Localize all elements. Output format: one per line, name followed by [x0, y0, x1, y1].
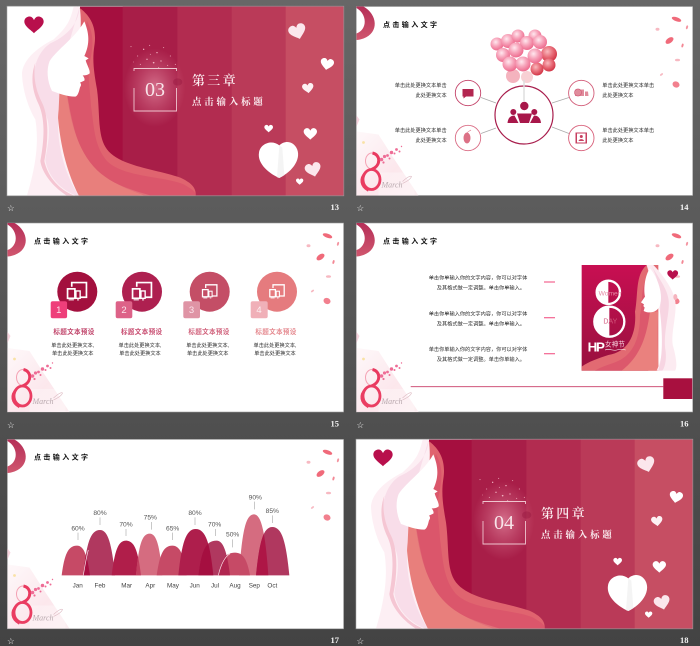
text block 2: 及其格式做一定调整。单击你单输入。 — [437, 320, 525, 328]
icon: chat bubble — [455, 80, 481, 106]
text block: upper right: 此处更换文本 — [602, 91, 633, 99]
text block: upper right — [602, 81, 654, 99]
month labels: Jan — [73, 582, 83, 589]
header: 点击输入文字 — [34, 452, 90, 462]
decorations: crescent, petals and number eight — [356, 223, 688, 412]
text block 2 — [429, 310, 528, 328]
item 4 — [251, 272, 297, 357]
text block: lower right: 此处更换文本 — [602, 136, 633, 144]
slide 16: text list with picture card — [356, 223, 693, 412]
month labels: May — [167, 582, 180, 589]
illustration: woman with flowing hair, stripes and hearts — [356, 440, 692, 628]
footer star 16: ☆ — [356, 421, 364, 431]
value labels — [71, 494, 279, 539]
chapter number: 04 — [494, 512, 514, 534]
header: 点击输入文字 — [383, 236, 439, 246]
month labels: Jun — [190, 582, 200, 589]
item 4: 标题文本预设 — [255, 327, 297, 336]
month labels: Mar — [121, 582, 132, 589]
chapter heading: 第三章 — [192, 73, 238, 88]
chapter number bracket — [134, 68, 176, 111]
slide 15: four numbered items — [7, 223, 344, 412]
item 2: 单击此处更换文本 — [119, 349, 161, 357]
value labels: 50% — [226, 532, 239, 539]
item 4: 单击此处更换文本, — [254, 341, 296, 349]
value labels: 70% — [119, 522, 133, 529]
logo: HP goddess festival — [588, 340, 626, 355]
page number 18: 18 — [680, 635, 688, 645]
decorations: crescent, petals and number eight — [8, 223, 339, 412]
text block 1: 单击你单输入你的文字内容，你可以对字体 — [429, 274, 528, 282]
month labels: Jul — [211, 582, 219, 589]
page number 17: 17 — [330, 635, 340, 645]
number eight with labels: DAY — [603, 318, 618, 325]
dash markers — [544, 282, 555, 354]
slide 17: mountain chart by month — [7, 439, 344, 629]
page number 13: 13 — [330, 202, 339, 212]
value labels: 75% — [144, 515, 157, 522]
item 2: 2 — [121, 305, 127, 316]
text block: lower left: 单击此处更换文本单击 — [395, 126, 447, 134]
text block: lower left: 此处更换文本 — [416, 136, 447, 144]
item 2: 单击此处更换文本, — [119, 341, 161, 349]
page number 15: 15 — [330, 418, 339, 428]
illustration: woman with flowing hair, stripes and hearts — [7, 7, 343, 195]
item 1 — [51, 272, 97, 357]
text block 3: 及其格式做一定调整。单击你单输入。 — [437, 355, 525, 363]
item 3: 3 — [189, 305, 194, 316]
item 3: 单击此处更换文本, — [186, 341, 229, 349]
number eight with labels: Women — [599, 291, 622, 298]
logo: HP goddess festival: HP — [588, 340, 605, 355]
footer block — [663, 378, 692, 399]
number eight with labels — [594, 281, 624, 337]
page number 16: 16 — [680, 418, 688, 428]
text block 3: 单击你单输入你的文字内容，你可以对字体 — [429, 345, 528, 353]
text block: upper right: 单击此处更换文本单击 — [602, 81, 654, 89]
chapter subtitle: 点击输入标题 — [541, 529, 615, 541]
item 2: 标题文本预设 — [121, 327, 162, 336]
connectors — [481, 98, 569, 134]
item 3: 标题文本预设 — [188, 327, 230, 336]
item 4: 单击此处更换文本 — [254, 349, 296, 357]
decorations: crescent, petals and number eight — [356, 6, 688, 196]
month labels: Oct — [267, 582, 277, 589]
text block 1: 及其格式做一定调整。单击你单输入。 — [437, 284, 525, 292]
text block: upper left — [395, 81, 447, 99]
header: 点击输入文字 — [383, 20, 439, 29]
chapter heading: 第四章 — [541, 506, 587, 521]
month labels: Sep — [249, 582, 260, 589]
slide 18: chapter four cover — [356, 439, 693, 629]
value labels: 80% — [188, 510, 202, 517]
footer star 13: ☆ — [7, 204, 15, 214]
item 1: 单击此处更换文本, — [51, 341, 94, 349]
value labels: 85% — [266, 508, 279, 515]
item 1: 标题文本预设 — [53, 327, 95, 336]
value labels: 90% — [249, 494, 262, 501]
month labels: Apr — [145, 582, 155, 589]
chapter number: 03 — [145, 79, 165, 101]
picture card: women's day poster — [582, 265, 677, 371]
hub circle with people icon — [495, 80, 553, 144]
header: 点击输入文字 — [34, 236, 90, 246]
chapter subtitle: 点击输入标题 — [192, 96, 266, 108]
leader lines — [78, 502, 273, 547]
month labels — [73, 582, 277, 589]
value labels: 80% — [93, 510, 107, 517]
item 3 — [183, 272, 230, 357]
text block 3 — [429, 345, 528, 363]
value labels: 60% — [71, 525, 85, 532]
item 4: 4 — [256, 305, 262, 316]
text block: upper left: 单击此处更换文本单击 — [395, 81, 447, 89]
icon: address book — [569, 125, 594, 151]
month labels: Aug — [229, 582, 241, 589]
footer star 14: ☆ — [356, 204, 364, 214]
icon: heart — [667, 270, 678, 280]
icon: computer mouse — [455, 125, 481, 151]
text block 2: 单击你单输入你的文字内容，你可以对字体 — [429, 310, 528, 318]
text block: lower right: 单击此处更换文本单击 — [602, 126, 654, 134]
value labels: 65% — [166, 525, 179, 532]
text block: lower right — [602, 126, 654, 144]
item 3: 单击此处更换文本 — [187, 349, 228, 357]
text block 1 — [429, 274, 528, 292]
logo: HP goddess festival: 女神节 — [605, 340, 625, 349]
footer star 15: ☆ — [7, 421, 15, 431]
text block: lower left — [395, 126, 447, 144]
footer rule — [411, 386, 663, 388]
chapter number bracket — [483, 502, 526, 544]
icon: delivery truck — [569, 80, 594, 106]
item 2 — [116, 272, 162, 357]
page number 14: 14 — [680, 202, 689, 212]
slide 14: balloon hub diagram — [356, 6, 693, 196]
item 1: 1 — [56, 305, 61, 316]
balloons — [490, 30, 557, 83]
value labels: 70% — [208, 522, 221, 529]
item 1: 单击此处更换文本 — [52, 349, 93, 357]
slide 13: chapter three cover — [7, 6, 344, 196]
mountain chart — [62, 494, 289, 589]
month labels: Feb — [95, 582, 106, 589]
text block: upper left: 此处更换文本 — [416, 91, 447, 99]
decorations: crescent, petals and number eight — [8, 440, 339, 628]
